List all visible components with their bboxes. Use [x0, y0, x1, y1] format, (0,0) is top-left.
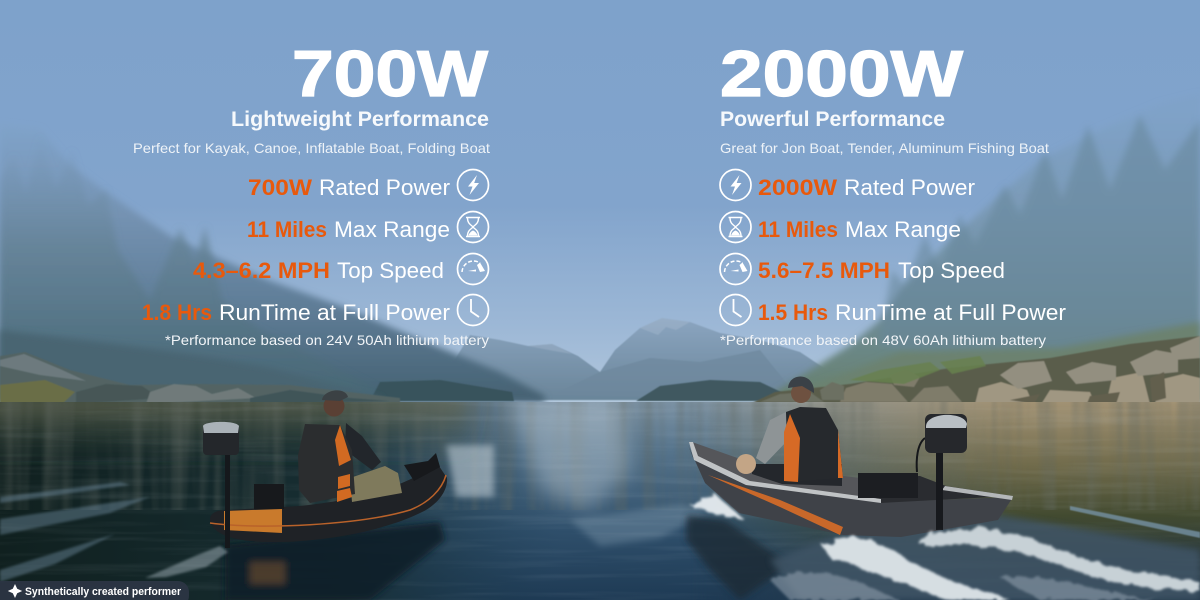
badge: synthetically created performer: Synthetically created performer [25, 586, 182, 598]
sleeve [756, 412, 788, 464]
badge: synthetically created performer [0, 581, 189, 600]
vest orange straps [335, 425, 352, 502]
left boat: person [298, 390, 402, 503]
motor top [203, 422, 239, 433]
icon: lightning bolt [720, 170, 751, 200]
spec: max range: Max Range [845, 217, 961, 242]
battery box [858, 473, 918, 498]
spec: runtime: RunTime at Full Power [219, 300, 450, 325]
cap [322, 390, 348, 401]
spec: top speed [193, 258, 444, 283]
life vest [786, 407, 843, 482]
heading: 2000W: 2000W [720, 37, 964, 110]
hull [688, 445, 1013, 537]
background: left forested mountain [0, 125, 545, 402]
spec: top speed: 4.3–6.2 MPH [193, 258, 330, 283]
suitable boats: Great for Jon Boat, Tender, Aluminum Fishing Boat [720, 140, 1049, 156]
power cable [917, 438, 925, 472]
orange panel [224, 509, 282, 533]
shorts [350, 466, 402, 502]
spec: rated power: 2000W [758, 175, 837, 200]
icon: lightning bolt [458, 170, 488, 200]
background: left rocky shore [0, 352, 400, 408]
footnote: *Performance based on 48V 60Ah lithium battery [720, 332, 1046, 348]
cap [788, 377, 814, 393]
spec: rated power: 700W [248, 175, 312, 200]
icon: hourglass [458, 212, 488, 242]
stern rail [942, 486, 1013, 500]
motor pole [225, 452, 230, 548]
icon: sparkle [8, 584, 22, 598]
icon: clock [458, 294, 488, 326]
left boat: water reflection [225, 522, 445, 600]
right boat: outboard motor [917, 414, 967, 530]
boat interior gear [254, 453, 440, 509]
stern deck [860, 476, 1012, 503]
spec: runtime: 1.8 Hrs [142, 300, 212, 325]
right boat: wake water [770, 515, 1200, 600]
left boat: ripples behind the boat [145, 546, 228, 578]
head [791, 383, 811, 403]
trousers [752, 464, 842, 486]
spec: top speed: Top Speed [898, 258, 1005, 283]
right boat: foaming wake [690, 495, 1200, 600]
motor pole [936, 452, 943, 530]
panel: 700W specifications [133, 37, 490, 348]
icon: hourglass [720, 212, 751, 242]
spec: rated power: Rated Power [319, 175, 450, 200]
spec: top speed: Top Speed [337, 258, 444, 283]
spec: runtime: 1.5 Hrs [758, 300, 828, 325]
spec: rated power: Rated Power [844, 175, 975, 200]
spec: runtime: RunTime at Full Power [835, 300, 1066, 325]
spec: max range: 11 Miles [758, 217, 838, 242]
right boat: water reflection [686, 515, 790, 600]
subheading: Lightweight Performance [231, 108, 489, 131]
icon: speedometer [720, 254, 751, 284]
spec: max range [758, 217, 961, 242]
hull [210, 463, 447, 542]
spec: max range: 11 Miles [247, 217, 327, 242]
life vest [298, 424, 355, 503]
panel: 2000W specifications [720, 37, 1066, 348]
arm [345, 423, 381, 470]
left boat: inflatable dinghy [210, 453, 447, 542]
spec: max range: Max Range [334, 217, 450, 242]
icon: clock [720, 294, 751, 326]
background: right rocky shore [750, 336, 1200, 408]
right boat: person [736, 377, 843, 486]
motor head [203, 424, 239, 455]
background: lake water [0, 392, 1200, 600]
footnote: *Performance based on 24V 50Ah lithium battery [165, 332, 489, 348]
spec: top speed [758, 258, 1005, 283]
suitable boats: Perfect for Kayak, Canoe, Inflatable Boat, Folding Boat [133, 140, 490, 156]
motor top [926, 415, 967, 428]
spec: rated power [758, 175, 975, 200]
left boat: outboard motor [203, 422, 239, 548]
orange stripe [708, 475, 843, 535]
head [324, 396, 344, 416]
spec: rated power [248, 175, 450, 200]
right boat: jon boat [688, 442, 1013, 537]
interior [692, 442, 881, 500]
heading: 700W: 700W [292, 37, 489, 110]
spec: max range [247, 217, 450, 242]
background: distant central mountains [430, 318, 830, 400]
orange trim [210, 475, 446, 526]
rim [689, 442, 881, 503]
subheading: Powerful Performance [720, 108, 945, 131]
vest orange panels [784, 414, 843, 482]
icon: speedometer [458, 254, 488, 284]
motor head [925, 414, 967, 453]
background: sky [0, 0, 1200, 410]
background: right forested slope [636, 95, 1200, 402]
spec: top speed: 5.6–7.5 MPH [758, 258, 890, 283]
fender [736, 454, 756, 474]
